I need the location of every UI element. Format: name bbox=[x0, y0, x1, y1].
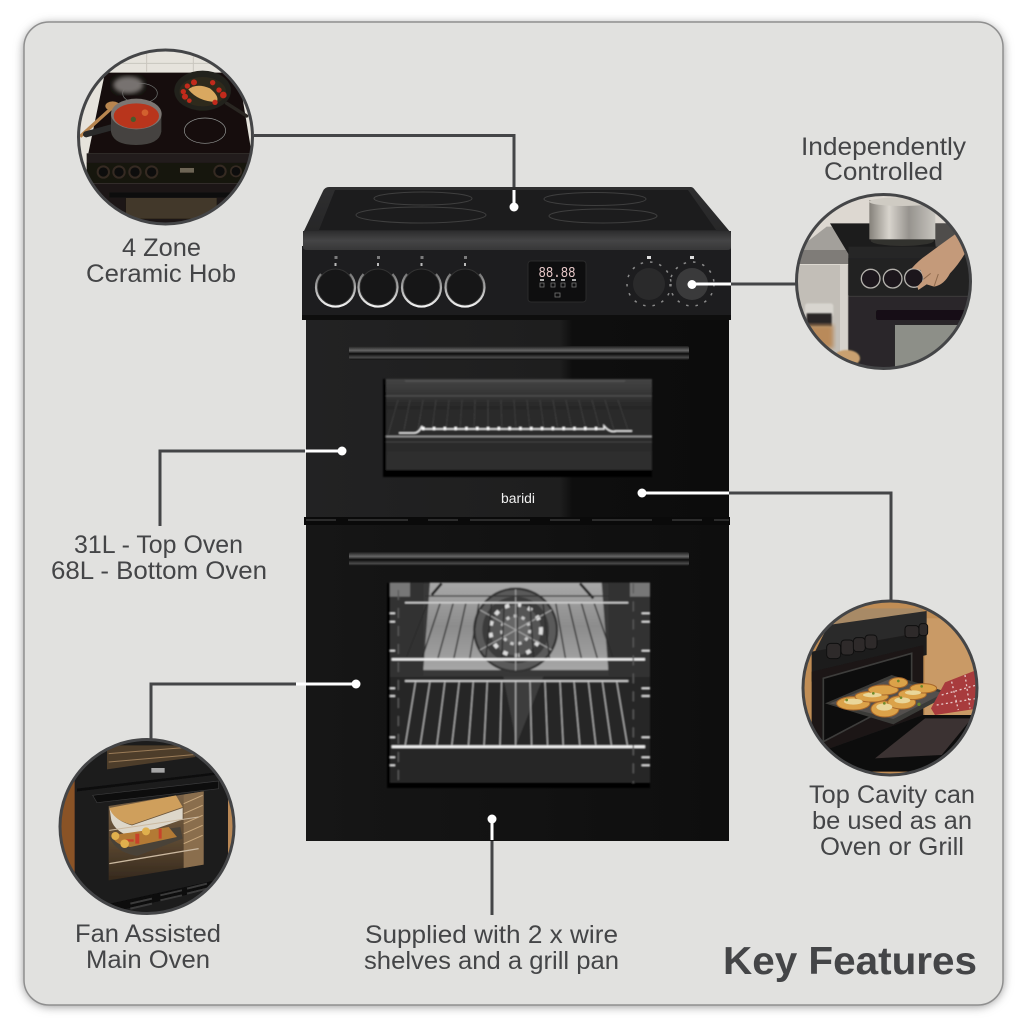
photo: top cavity grill bbox=[802, 600, 978, 776]
digital display: 88.88 bbox=[538, 265, 576, 282]
label: top cavity oven or grill bbox=[809, 781, 975, 861]
digital display bbox=[528, 261, 586, 302]
label: independently controlled bbox=[801, 133, 967, 186]
bottom oven window bbox=[387, 583, 650, 788]
photo: ceramic hob bbox=[77, 48, 254, 226]
label: 4 zone ceramic hob: 4 Zone bbox=[122, 234, 201, 262]
label: top cavity oven or grill: Oven or Grill bbox=[820, 833, 964, 861]
bottom oven door bbox=[306, 525, 729, 841]
hob knobs bbox=[316, 256, 484, 307]
photo: fan assisted oven bbox=[58, 738, 236, 915]
hob top bbox=[303, 187, 731, 236]
label: oven capacities: 68L - Bottom Oven bbox=[51, 557, 267, 585]
label: oven capacities bbox=[51, 531, 267, 585]
leader lines bbox=[151, 136, 891, 915]
label: 4 zone ceramic hob bbox=[86, 234, 236, 288]
label: supplied shelves and grill pan: Supplied with 2 x wire bbox=[365, 921, 618, 949]
label: oven capacities: 31L - Top Oven bbox=[74, 531, 243, 559]
control panel bbox=[302, 246, 731, 320]
title: Key Features bbox=[723, 940, 977, 983]
callout markers on cooker bbox=[296, 190, 731, 840]
label: top cavity oven or grill: Top Cavity can bbox=[809, 781, 975, 809]
bottom oven handle bbox=[349, 552, 689, 566]
photo: independently controlled bbox=[795, 193, 972, 370]
label: 4 zone ceramic hob: Ceramic Hob bbox=[86, 260, 236, 288]
top oven door bbox=[304, 320, 730, 525]
front lip bbox=[303, 231, 731, 250]
top oven handle bbox=[349, 346, 689, 360]
function dials bbox=[627, 256, 714, 306]
brand logo: baridi bbox=[501, 491, 535, 506]
label: independently controlled: Independently bbox=[801, 133, 967, 161]
label: top cavity oven or grill: be used as an bbox=[812, 807, 972, 835]
label: fan assisted main oven bbox=[75, 920, 221, 974]
label: supplied shelves and grill pan: shelves and a grill pan bbox=[364, 947, 619, 975]
label: supplied shelves and grill pan bbox=[364, 921, 619, 975]
label: fan assisted main oven: Fan Assisted bbox=[75, 920, 221, 948]
label: independently controlled: Controlled bbox=[824, 158, 943, 186]
label: fan assisted main oven: Main Oven bbox=[86, 946, 210, 974]
top oven window bbox=[383, 379, 652, 477]
